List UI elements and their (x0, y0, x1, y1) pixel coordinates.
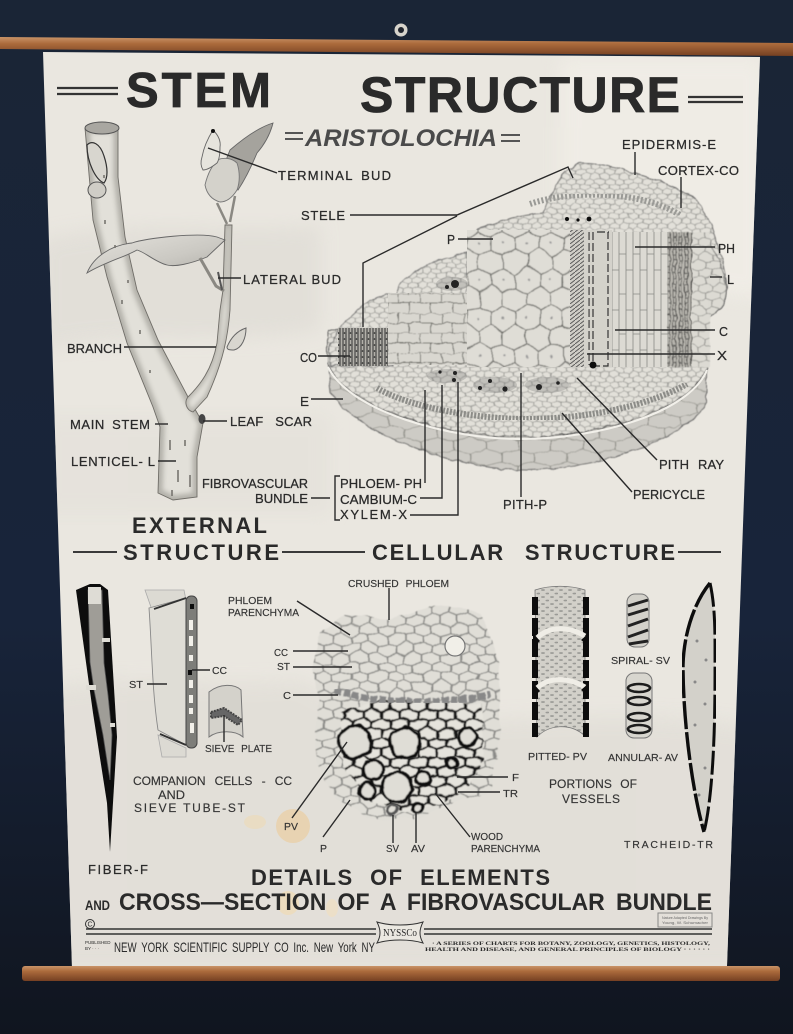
phloem label: PHLOEM- PH (340, 476, 422, 491)
label: F (457, 772, 519, 784)
label: PH: PH (718, 241, 735, 256)
label: leaf scar: LEAF SCAR (230, 414, 312, 429)
publisher line: PUBLISHED (85, 940, 111, 945)
main stem (85, 128, 203, 500)
label: stele: STELE (301, 208, 345, 223)
caption: companion cells (133, 774, 292, 815)
spiral vessel (627, 594, 649, 647)
label: C: C (719, 324, 728, 339)
label: crushed phloem (348, 579, 449, 620)
heading: details: DETAILS OF ELEMENTS (251, 865, 550, 890)
fiber black wall (76, 584, 117, 852)
label: stele (301, 167, 573, 327)
label: TR (458, 788, 518, 800)
label: wood parenchyma: WOOD (471, 832, 503, 843)
label: CC: CC (274, 647, 288, 659)
label: C: C (283, 690, 291, 702)
label: wood parenchyma (435, 793, 540, 855)
label: epidermis (622, 137, 716, 175)
label: phloem parenchyma: PHLOEM (228, 596, 272, 607)
rear vascular band (530, 195, 680, 215)
label: pericycle (562, 413, 705, 502)
terminal leaf body (205, 158, 239, 202)
label: SV (386, 815, 399, 855)
spot halos (427, 277, 569, 393)
bud base on main stem (88, 182, 106, 198)
cambium label: CAMBIUM-C (340, 492, 417, 507)
label: wood parenchyma: PARENCHYMA (471, 844, 540, 855)
tracheid body (683, 583, 715, 832)
label: branch: BRANCH (67, 341, 122, 356)
label: P (320, 800, 350, 855)
bottom wooden rod (22, 966, 780, 981)
sieve plate drawing (209, 685, 243, 737)
copyright mark: C (88, 922, 93, 928)
emblem: NYSSCo: NYSSCo (383, 927, 417, 939)
label: X: X (717, 348, 727, 363)
label: ST: ST (277, 661, 291, 673)
label: AV: AV (411, 843, 425, 855)
xylem label (340, 382, 458, 522)
thick xylem cells (340, 700, 485, 813)
label: pith: PITH-P (503, 497, 547, 512)
label: pith (503, 373, 547, 512)
phloem large cell (445, 636, 465, 656)
label: annular: ANNULAR- AV (608, 752, 678, 764)
label: fiber: FIBER-F (88, 862, 148, 877)
heading: external structure: STRUCTURE (123, 540, 279, 565)
label: main stem: MAIN STEM (70, 417, 150, 432)
label: PV: PV (284, 821, 298, 833)
branch (186, 225, 232, 412)
heading: external structure: EXTERNAL (132, 513, 267, 538)
label: CO: CO (300, 350, 317, 365)
terminal bud tip (211, 129, 215, 133)
label: crushed phloem: CRUSHED PHLOEM (348, 579, 449, 590)
upper rear dome (477, 163, 727, 316)
petiole (200, 258, 224, 291)
cortex cut face (388, 293, 467, 365)
pith cut face (467, 230, 570, 367)
label: fibrovascular bundle: FIBROVASCULAR (202, 476, 308, 491)
companion nuclei (190, 604, 192, 675)
caption: companion cells: COMPANION CELLS - CC (133, 774, 292, 788)
label: epidermis: EPIDERMIS-E (622, 137, 716, 152)
bud on main stem (87, 143, 107, 183)
label: C (283, 690, 338, 702)
pitted end walls (537, 629, 585, 688)
lateral bud (218, 272, 222, 290)
label: L (710, 272, 734, 287)
outer cut face (692, 232, 710, 367)
label: ST side: ST (129, 679, 144, 691)
footer double rules (86, 929, 712, 934)
label: CO (300, 350, 350, 365)
label: lenticel: LENTICEL- L (71, 454, 155, 469)
companion cell (186, 596, 197, 748)
label: terminal bud (208, 148, 391, 183)
label: CC (274, 647, 348, 659)
external stem drawing (85, 122, 273, 500)
small printer box (658, 913, 712, 927)
pitted side walls (535, 597, 586, 737)
label: pith ray: PITH RAY (659, 457, 724, 472)
tracheid (683, 583, 715, 832)
label: E (300, 394, 343, 409)
phloem label (340, 390, 425, 491)
label: P top (447, 232, 493, 247)
cut stem top (85, 122, 119, 134)
annular vessel (626, 673, 652, 738)
heading: external structure (123, 513, 279, 565)
label: phloem parenchyma: PARENCHYMA (228, 608, 299, 619)
heading: cross-section: CROSS—SECTION OF A FIBROVASCULAR BUNDLE (119, 889, 712, 916)
label: C (615, 324, 728, 339)
main stem outline (85, 128, 203, 500)
label: PH (635, 241, 735, 256)
publisher line (85, 939, 375, 955)
dark bundle cut face (668, 232, 692, 367)
label: phloem parenchyma (228, 596, 350, 635)
fiber drawing (76, 584, 117, 852)
pitted segments (535, 586, 585, 737)
label: P top: P (447, 232, 455, 247)
subtitle: aristolochia: ARISTOLOCHIA (304, 125, 497, 152)
label: cortex: CORTEX-CO (658, 163, 739, 178)
terminal bud (201, 130, 220, 170)
cambium band (335, 690, 490, 702)
label: F: F (512, 772, 519, 784)
label: pericycle: PERICYCLE (633, 487, 705, 502)
lower bud (227, 328, 246, 350)
caption: companion cells: AND (158, 788, 185, 802)
tracheid pits (694, 640, 708, 796)
hanging hook (394, 24, 408, 36)
title: right rule (688, 97, 743, 102)
top wooden rod (0, 37, 793, 56)
label: sieve plate (205, 715, 272, 755)
label: tracheid: TRACHEID-TR (624, 839, 713, 851)
caption: companion cells: SIEVE TUBE-ST (134, 801, 246, 815)
series note: · A SERIES OF CHARTS FOR BOTANY, ZOOLOGY, GENETICS, HISTOLOGY, (432, 941, 711, 947)
label: CC side: CC (212, 665, 227, 677)
small printer box: Nature Adapted Drawings By (662, 915, 708, 920)
label: fibrovascular bundle (202, 382, 458, 522)
low left dome (330, 293, 392, 366)
title (57, 64, 743, 123)
light phloem cells (305, 600, 505, 825)
vascular strip detail (589, 232, 609, 366)
fiber lumen (88, 590, 112, 780)
sieve tube main cell (149, 598, 186, 745)
copyright mark (86, 920, 94, 928)
cambium label (340, 385, 442, 507)
cylinder block diagram (328, 163, 727, 470)
sieve tube drawing (145, 590, 197, 757)
cross-section of fibrovascular bundle (305, 600, 505, 825)
disk side wall (328, 365, 707, 470)
branch edge shading (186, 225, 232, 412)
lenticels (104, 175, 190, 496)
label: terminal bud: TERMINAL BUD (278, 168, 391, 183)
label: pith ray (577, 378, 724, 472)
label: ST side (129, 679, 167, 691)
branch outline (186, 225, 232, 412)
companion cell holes (191, 620, 192, 733)
small printer box: Young, W. Schumacher (662, 920, 709, 925)
label: P: P (320, 843, 327, 855)
title: stem: STEM (126, 64, 271, 118)
pitted vessel (533, 586, 589, 737)
xylem label: XYLEM-X (340, 507, 407, 522)
heading: cross-section: AND (85, 897, 110, 913)
title: structure: STRUCTURE (360, 67, 680, 123)
second dome (397, 253, 467, 300)
tracheid left wall (683, 583, 710, 832)
fiber pits (86, 587, 115, 727)
disk top surface (328, 330, 707, 437)
label: E: E (300, 394, 309, 409)
longitudinal cut face (612, 232, 672, 367)
outer face lower right (708, 240, 727, 318)
label: ST (277, 661, 352, 673)
caption: portions of vessels (549, 777, 637, 806)
terminal leaf blade (222, 123, 273, 190)
label: AV (411, 813, 425, 855)
sieve tube end walls (154, 598, 186, 745)
publisher line: BY · · · (85, 946, 99, 951)
heading: cellular structure: CELLULAR STRUCTURE (372, 540, 675, 565)
label: CC side (192, 665, 227, 677)
label: SV: SV (386, 843, 399, 855)
horizontal leaf (87, 235, 225, 273)
leaf scar (198, 414, 206, 424)
main stem edge shading (85, 128, 203, 500)
series note (425, 941, 711, 953)
series note: HEALTH AND DISEASE, AND GENERAL PRINCIPLES OF BIOLOGY · · · · · · (425, 947, 710, 953)
label: fibrovascular bundle: BUNDLE (255, 491, 308, 506)
caption: portions of vessels: VESSELS (562, 792, 620, 806)
vascular spots (438, 217, 596, 392)
upper stalks (217, 196, 235, 224)
pitted joints (533, 633, 589, 697)
large vessels (339, 726, 476, 815)
label: cortex (658, 163, 739, 208)
caption: portions of vessels: PORTIONS OF (549, 777, 637, 791)
label: L: L (727, 272, 734, 287)
publisher line: NEW YORK SCIENTIFIC SUPPLY CO Inc. New York NY (114, 939, 375, 955)
label: TR: TR (503, 788, 518, 800)
label: spiral: SPIRAL- SV (611, 655, 670, 667)
sieve tube stubs (145, 590, 186, 757)
vascular cut face low left (338, 328, 388, 366)
pericycle ring (377, 384, 687, 419)
tracheid right wall (704, 583, 715, 832)
epidermis rim (328, 367, 707, 439)
emblem: NYSSCo (377, 922, 423, 943)
spiral vessel strip (570, 230, 584, 367)
label: PV (284, 742, 347, 833)
title: left rule (57, 88, 118, 94)
vascular strip (584, 230, 612, 367)
label: lateral bud: LATERAL BUD (243, 272, 341, 287)
label: sieve plate: SIEVE PLATE (205, 744, 272, 755)
label: pitted: PITTED- PV (528, 751, 587, 763)
